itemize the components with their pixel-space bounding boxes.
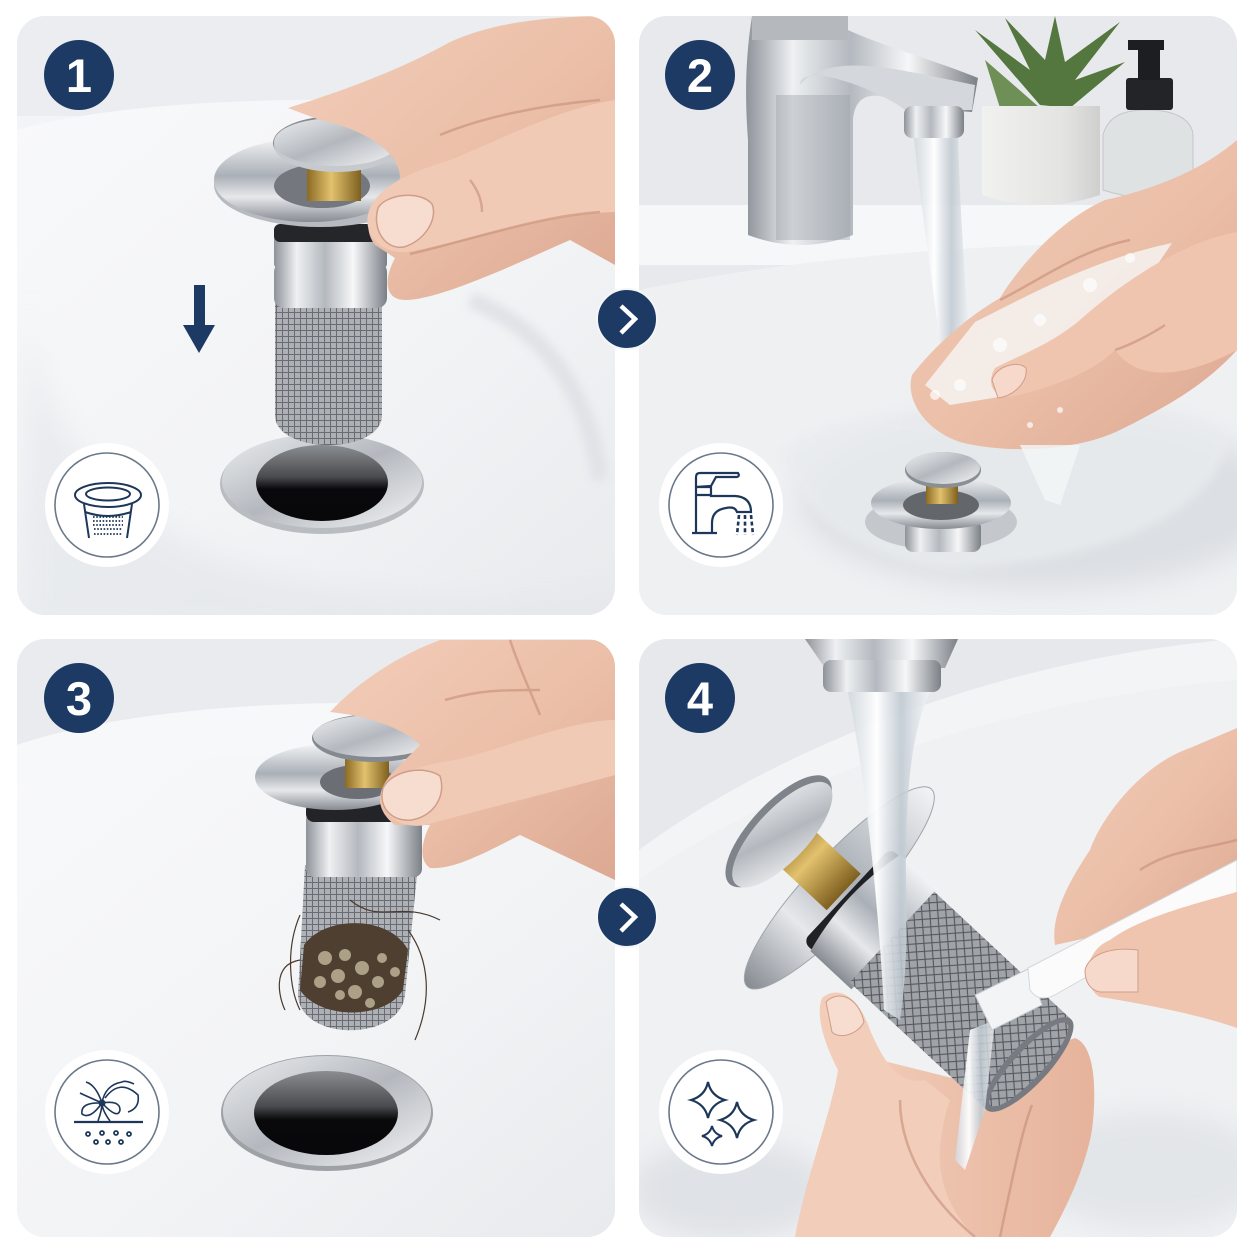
panel 4: brushing the strainer under water bbox=[630, 639, 1254, 1240]
step number 2 bbox=[665, 40, 735, 110]
step number 3: 3 bbox=[66, 672, 92, 725]
faucet bbox=[746, 16, 978, 245]
step number 1 bbox=[44, 40, 114, 110]
running water bbox=[848, 692, 930, 1020]
icon: sparkles bbox=[659, 1050, 783, 1174]
connector arrow: step 1 to 2 bbox=[597, 289, 657, 349]
drain opening bbox=[220, 434, 424, 534]
plant bbox=[975, 16, 1125, 205]
step number 2: 2 bbox=[687, 49, 713, 102]
running water bbox=[914, 138, 966, 342]
brush bbox=[975, 860, 1237, 1030]
panel 3: strainer catches debris bbox=[17, 639, 615, 1237]
hand holding the brush: lower finger bbox=[1085, 892, 1237, 1028]
icon: hair and debris bbox=[45, 1050, 169, 1174]
strainer with hair and debris bbox=[255, 714, 440, 1040]
icon: strainer basket bbox=[45, 443, 169, 567]
holding hand: thumb bbox=[795, 993, 975, 1237]
lower water runoff bbox=[955, 1020, 995, 1170]
stopper in drain bbox=[865, 452, 1017, 552]
step number 1: 1 bbox=[66, 49, 92, 102]
hand holding the brush: upper fingers bbox=[1054, 728, 1237, 945]
drain opening bbox=[221, 1055, 433, 1171]
panel 2: washing hands bbox=[639, 16, 1254, 615]
hands with soap bbox=[911, 140, 1237, 449]
arrow: downward bbox=[183, 285, 215, 353]
holding hand: palm and fingers behind strainer bbox=[886, 1038, 1094, 1237]
stopper and mesh strainer bbox=[725, 775, 1074, 1112]
panel 1: inserting the strainer bbox=[17, 16, 640, 640]
faucet outlet bbox=[805, 639, 958, 692]
hand holding the stopper bbox=[330, 640, 615, 880]
step number 4 bbox=[665, 663, 735, 733]
connector arrow: step 3 to 4 bbox=[597, 887, 657, 947]
icon: faucet bbox=[659, 443, 783, 567]
hand holding the stopper bbox=[288, 16, 615, 300]
step number 3 bbox=[44, 663, 114, 733]
step number 4: 4 bbox=[687, 672, 713, 725]
strainer held above drain bbox=[214, 118, 400, 445]
falling water under hands bbox=[1020, 445, 1080, 505]
soap dispenser bbox=[1103, 40, 1193, 198]
